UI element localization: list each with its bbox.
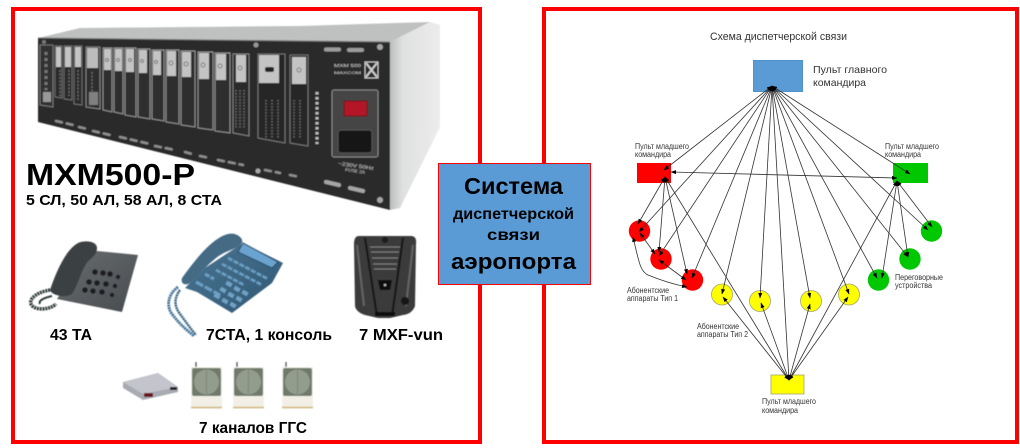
label: 7 GGS channels: 7 каналов ГГС <box>199 420 307 437</box>
text: line counts: 5 СЛ, 50 АЛ, 58 АЛ, 8 СТА <box>26 192 222 209</box>
label: 43 TA: 43 ТА <box>50 327 92 344</box>
label: 7 MXF-vun: 7 MXF-vun <box>359 327 443 344</box>
heading: MXM500-P: MXM500-P <box>26 157 195 192</box>
callout: airport dispatch system <box>438 164 590 284</box>
node: red junior commander console <box>637 163 671 183</box>
node: main commander console <box>754 60 802 92</box>
image: MXM500 rack unit: FUSE 2A <box>345 167 365 175</box>
label: talk-back devices: устройства <box>895 281 932 290</box>
callout: airport dispatch system: аэропорта <box>451 249 577 274</box>
icon: black desk phone <box>31 241 138 312</box>
node: green junior commander console <box>893 163 928 183</box>
icon: loudspeaker 3 <box>282 362 313 408</box>
label: yellow junior commander: командира <box>762 406 798 415</box>
callout: airport dispatch system: диспетчерской <box>453 206 574 223</box>
image: MXM500 rack unit <box>38 22 440 210</box>
label: 7CTA, 1 console: 7СТА, 1 консоль <box>206 327 332 344</box>
label: yellow junior commander: Пульт младшего <box>762 397 816 406</box>
icon: loudspeaker amplifier box <box>123 373 178 400</box>
nodes: green talk-back devices <box>868 220 942 291</box>
label: talk-back devices: Переговорные <box>895 273 943 282</box>
icon: blue system phone <box>169 234 283 336</box>
callout: airport dispatch system: Система <box>464 173 563 199</box>
panel: dispatch scheme <box>544 9 1017 442</box>
nodes: red subscriber sets type 1 <box>629 220 703 291</box>
label: subscriber sets type 2: аппараты Тип 2 <box>697 330 748 339</box>
image: MXM500 rack unit: MXM 500 <box>334 63 362 68</box>
panel: equipment <box>13 9 480 442</box>
image: MXM500 rack unit: ~230V 50Hz <box>338 161 375 172</box>
icon: loudspeaker 1 <box>191 362 222 408</box>
label: green junior commander: командира <box>885 150 921 159</box>
node: yellow junior commander console <box>771 375 804 394</box>
label: green junior commander: Пульт младшего <box>885 142 939 151</box>
label: subscriber sets type 1: аппараты Тип 1 <box>627 294 678 303</box>
callout: airport dispatch system: связи <box>487 227 540 244</box>
label: red junior commander: командира <box>635 150 671 159</box>
icon: loudspeaker 2 <box>233 362 264 408</box>
label: subscriber sets type 1: Абонентские <box>627 286 669 295</box>
icon: MXF-vun intercom <box>354 236 416 318</box>
label: red junior commander: Пульт младшего <box>635 142 689 151</box>
label: main commander console: Пульт главного <box>813 64 887 76</box>
title: dispatch scheme: Схема диспетчерской связи <box>710 31 847 43</box>
label: subscriber sets type 2: Абонентские <box>697 322 739 331</box>
label: main commander console: командира <box>813 77 866 89</box>
image: MXM500 rack unit: MAXCOM <box>334 70 361 75</box>
nodes: yellow subscriber sets type 2 <box>712 284 860 312</box>
connections: scheme arrows <box>633 86 932 380</box>
